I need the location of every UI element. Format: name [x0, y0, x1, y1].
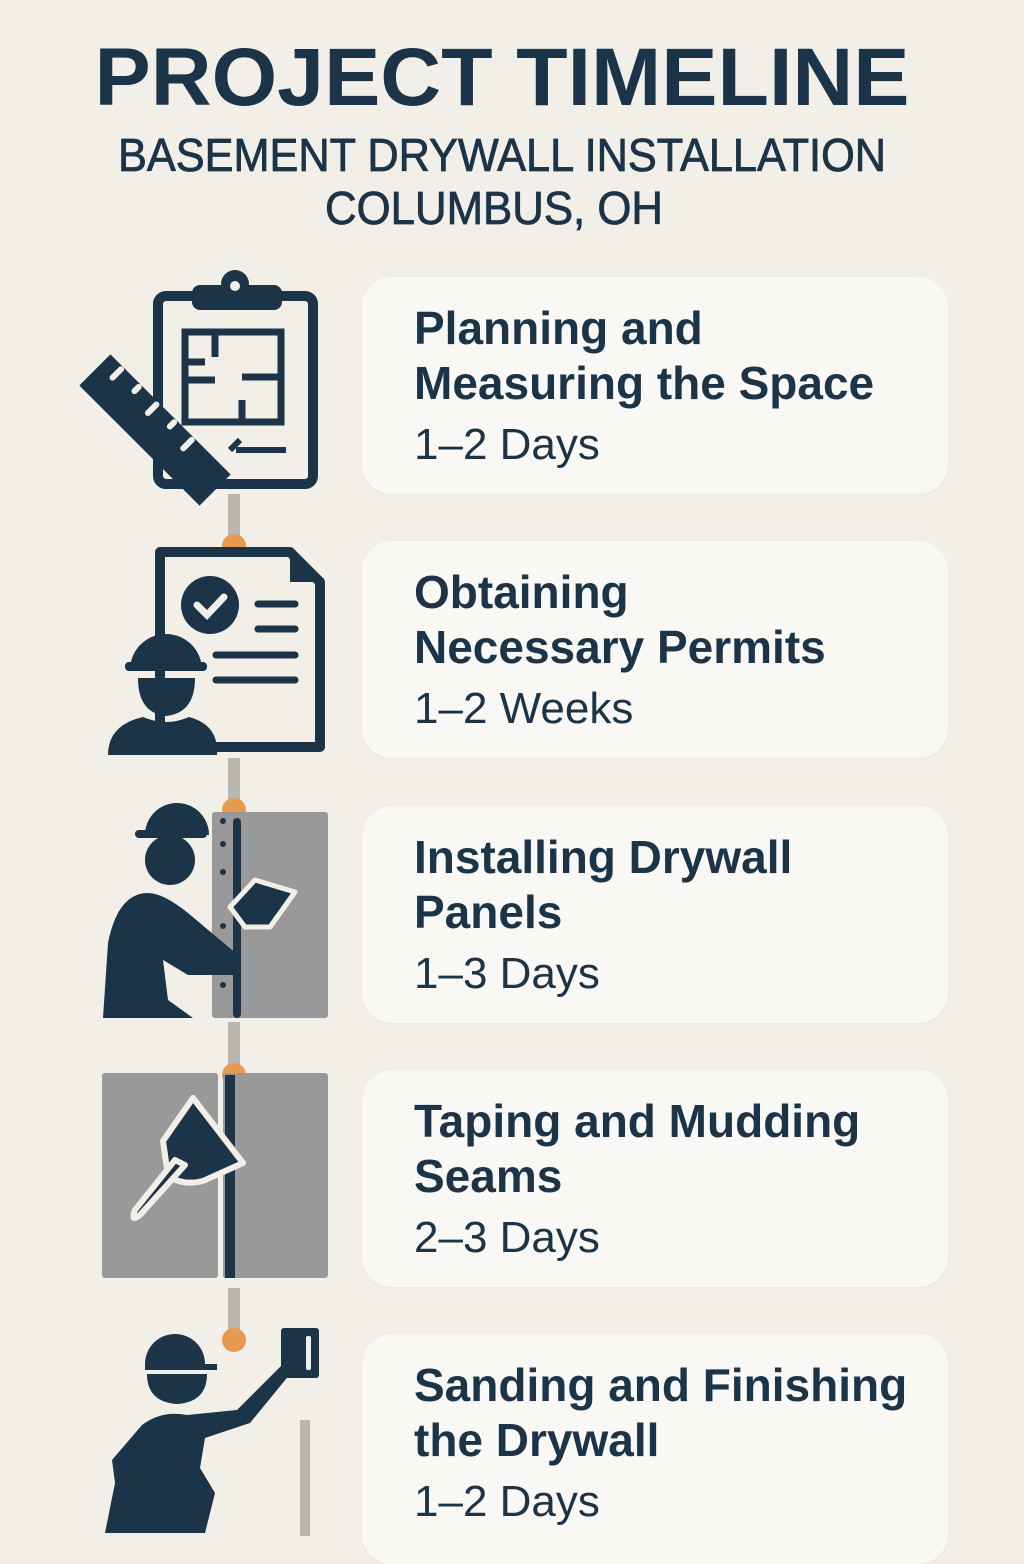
card 4: taping — [362, 1070, 948, 1287]
card 5: sanding: the Drywall — [414, 1414, 659, 1466]
title: BASEMENT DRYWALL INSTALLATION — [118, 129, 886, 181]
card 2: permits: 1–2 Weeks — [414, 684, 633, 733]
card 3: installing: Installing Drywall — [414, 831, 792, 883]
card 4: taping: Seams — [414, 1150, 562, 1202]
card 3: installing — [362, 806, 948, 1023]
card 1: planning — [362, 277, 948, 494]
card 3: installing: 1–3 Days — [414, 949, 600, 998]
card 1: planning: Measuring the Space — [414, 357, 874, 409]
title — [94, 32, 910, 234]
card 1: planning: Planning and — [414, 302, 703, 354]
card 4: taping: 2–3 Days — [414, 1213, 600, 1262]
card 3: installing: Panels — [414, 886, 562, 938]
card 5: sanding: Sanding and Finishing — [414, 1359, 907, 1411]
card 4: taping: Taping and Mudding — [414, 1095, 860, 1147]
card 2: permits — [362, 541, 948, 758]
title: COLUMBUS, OH — [325, 182, 663, 234]
card 1: planning: 1–2 Days — [414, 420, 600, 469]
title: PROJECT TIMELINE — [94, 32, 910, 123]
card 5: sanding — [362, 1334, 948, 1564]
card 5: sanding: 1–2 Days — [414, 1477, 600, 1526]
card 2: permits: Obtaining — [414, 566, 629, 618]
card 2: permits: Necessary Permits — [414, 621, 826, 673]
